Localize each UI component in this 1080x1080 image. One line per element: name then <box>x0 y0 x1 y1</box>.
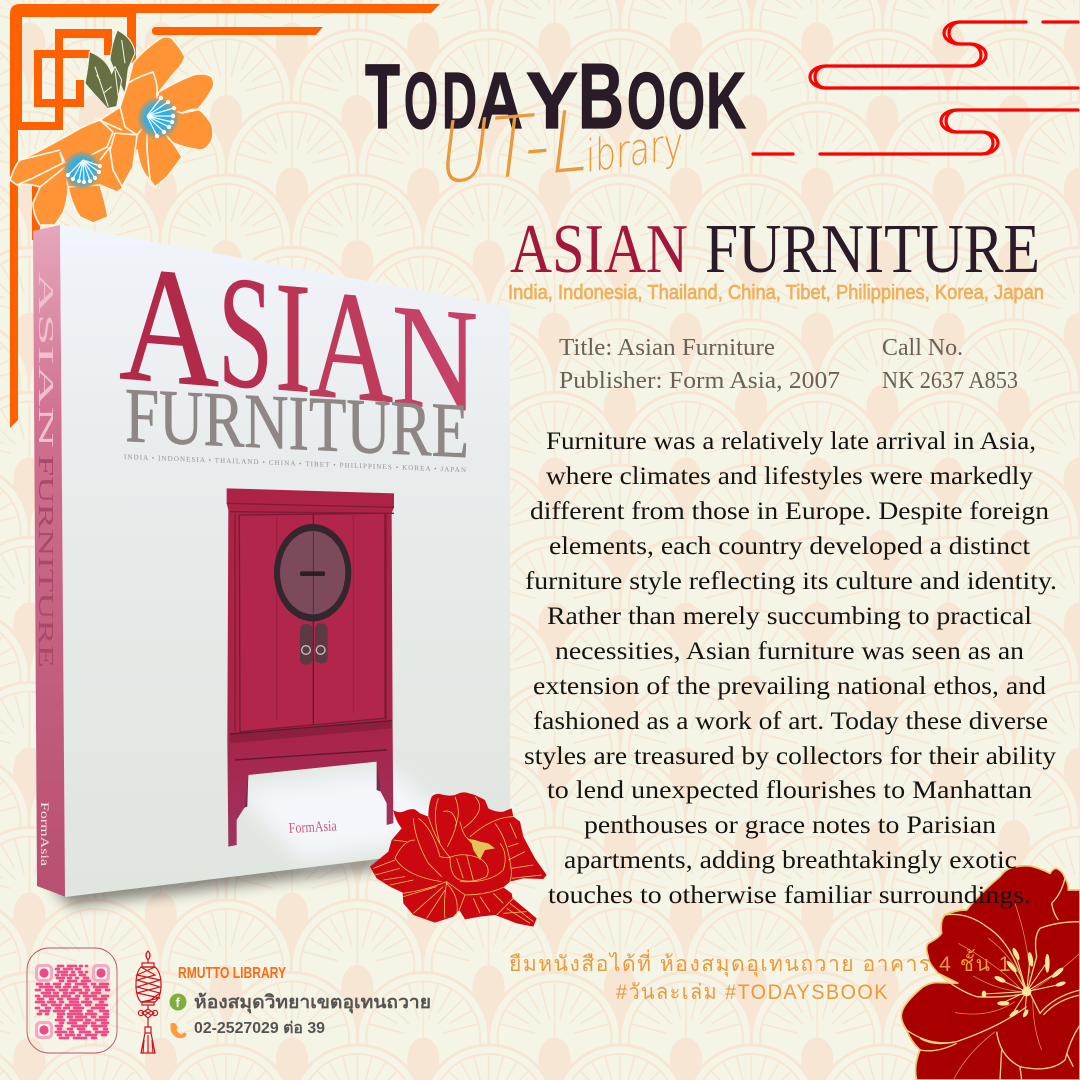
big red flower bottom right <box>901 866 1080 1080</box>
title: TodayBook: A <box>477 56 523 145</box>
cover title: FURNITURE: FURNITURE <box>125 371 469 474</box>
call to action: ยืมหนังสือได้ที่ ห้องสมุดอุเทนถวาย อาคาร 4 ชั้น 1 <box>509 949 1012 977</box>
contact: facebook page: ห้องสมุดวิทยาเขตอุเทนถวาย <box>194 992 431 1014</box>
book spine: FormAsia <box>38 802 52 867</box>
script subtitle: UT-Library: ibrary <box>586 118 683 183</box>
subtitle: countries: India, Indonesia, Thailand, China, Tibet, Philippines, Korea, Japan <box>508 282 1044 304</box>
body paragraph: extension of the prevailing national ethos, and <box>533 673 1047 700</box>
script subtitle: UT-Library: UT-L <box>433 92 595 204</box>
call to action <box>509 949 1012 1004</box>
book shadow <box>50 832 512 906</box>
body paragraph: penthouses or grace notes to Parisian <box>584 812 997 839</box>
contact: library name: RMUTTO LIBRARY <box>178 965 286 982</box>
red cloud line ornament <box>753 22 1078 154</box>
body paragraph: elements, each country developed a distinct <box>549 533 1030 560</box>
QR finder squares <box>35 964 110 1039</box>
contact: phone number: 02-2527029 ต่อ 39 <box>194 1020 325 1037</box>
body paragraph <box>524 428 1057 909</box>
cover title: ASIAN: A <box>119 230 219 422</box>
book cover photo <box>33 225 512 906</box>
title: TodayBook: O <box>404 56 438 145</box>
cover country list: INDIA • INDONESIA • THAILAND • CHINA • TIBET • PHILIPPINES • KOREA • JAPAN <box>124 453 466 474</box>
title: TodayBook: O <box>668 56 705 145</box>
body paragraph: to lend unexpected flourishes to Manhattan <box>547 777 1033 804</box>
title: TodayBook: O <box>627 56 666 145</box>
title: TodayBook: T <box>365 46 400 148</box>
heading: ASIAN FURNITURE <box>510 211 1040 288</box>
icon: orange petals <box>10 37 214 225</box>
QR code with frame <box>27 948 117 1053</box>
book metadata <box>559 335 1018 394</box>
body paragraph: Furniture was a relatively late arrival in Asia, <box>546 428 1036 455</box>
icon: olive leaves <box>85 30 135 108</box>
QR modules <box>36 966 109 1038</box>
cover title: ASIAN: I <box>275 249 311 427</box>
icon: phone <box>171 1023 186 1038</box>
cover title: ASIAN: N <box>392 273 478 443</box>
cover title: ASIAN: A <box>309 256 393 436</box>
book metadata: NK 2637 A853 <box>882 368 1018 394</box>
body paragraph: different from those in Europe. Despite foreign <box>530 498 1050 525</box>
icon: facebook <box>170 994 186 1010</box>
title: TodayBook: Y <box>526 56 578 145</box>
book spine: ASIAN <box>34 272 58 448</box>
body paragraph: where climates and lifestyles were markedly <box>546 463 1034 490</box>
book spine: FURNITURE <box>34 455 58 668</box>
title: TodayBook: B <box>578 44 624 148</box>
book metadata: Call No. <box>882 335 963 361</box>
book spine <box>33 225 66 897</box>
cover title: ASIAN: S <box>218 241 273 423</box>
cover title: ASIAN <box>119 230 478 443</box>
body paragraph: touches to otherwise familiar surroundings. <box>548 882 1031 909</box>
title: TodayBook <box>365 44 746 148</box>
cover publisher logo: FormAsia <box>288 818 337 837</box>
icon: blue flower centres <box>135 95 181 141</box>
body paragraph: Rather than merely succumbing to practical <box>547 603 1032 630</box>
call to action: #วันละเล่ม #TODAYSBOOK <box>616 981 889 1004</box>
book metadata: Publisher: Form Asia, 2007 <box>559 368 840 394</box>
body paragraph: fashioned as a work of art. Today these diverse <box>533 708 1048 735</box>
heading: ASIAN FURNITURE: ASIAN <box>510 211 688 288</box>
orange corner frame <box>10 4 440 428</box>
icon: facebook: f <box>176 995 180 1010</box>
orange flower with leaves <box>10 30 214 225</box>
title: TodayBook: D <box>442 56 477 145</box>
title: TodayBook: K <box>706 56 746 145</box>
body paragraph: styles are treasured by collectors for their ability <box>524 743 1057 770</box>
red cabinet <box>227 488 394 847</box>
icon: red Chinese lantern <box>136 951 161 1053</box>
body paragraph: necessities, Asian furniture was seen as an <box>555 638 1025 665</box>
body paragraph: furniture style reflecting its culture and identity. <box>525 568 1057 595</box>
book front cover <box>60 225 510 897</box>
body paragraph: apartments, adding breathtakingly exotic <box>564 847 1017 874</box>
book metadata: Title: Asian Furniture <box>559 335 775 361</box>
red peony flower <box>370 792 547 927</box>
